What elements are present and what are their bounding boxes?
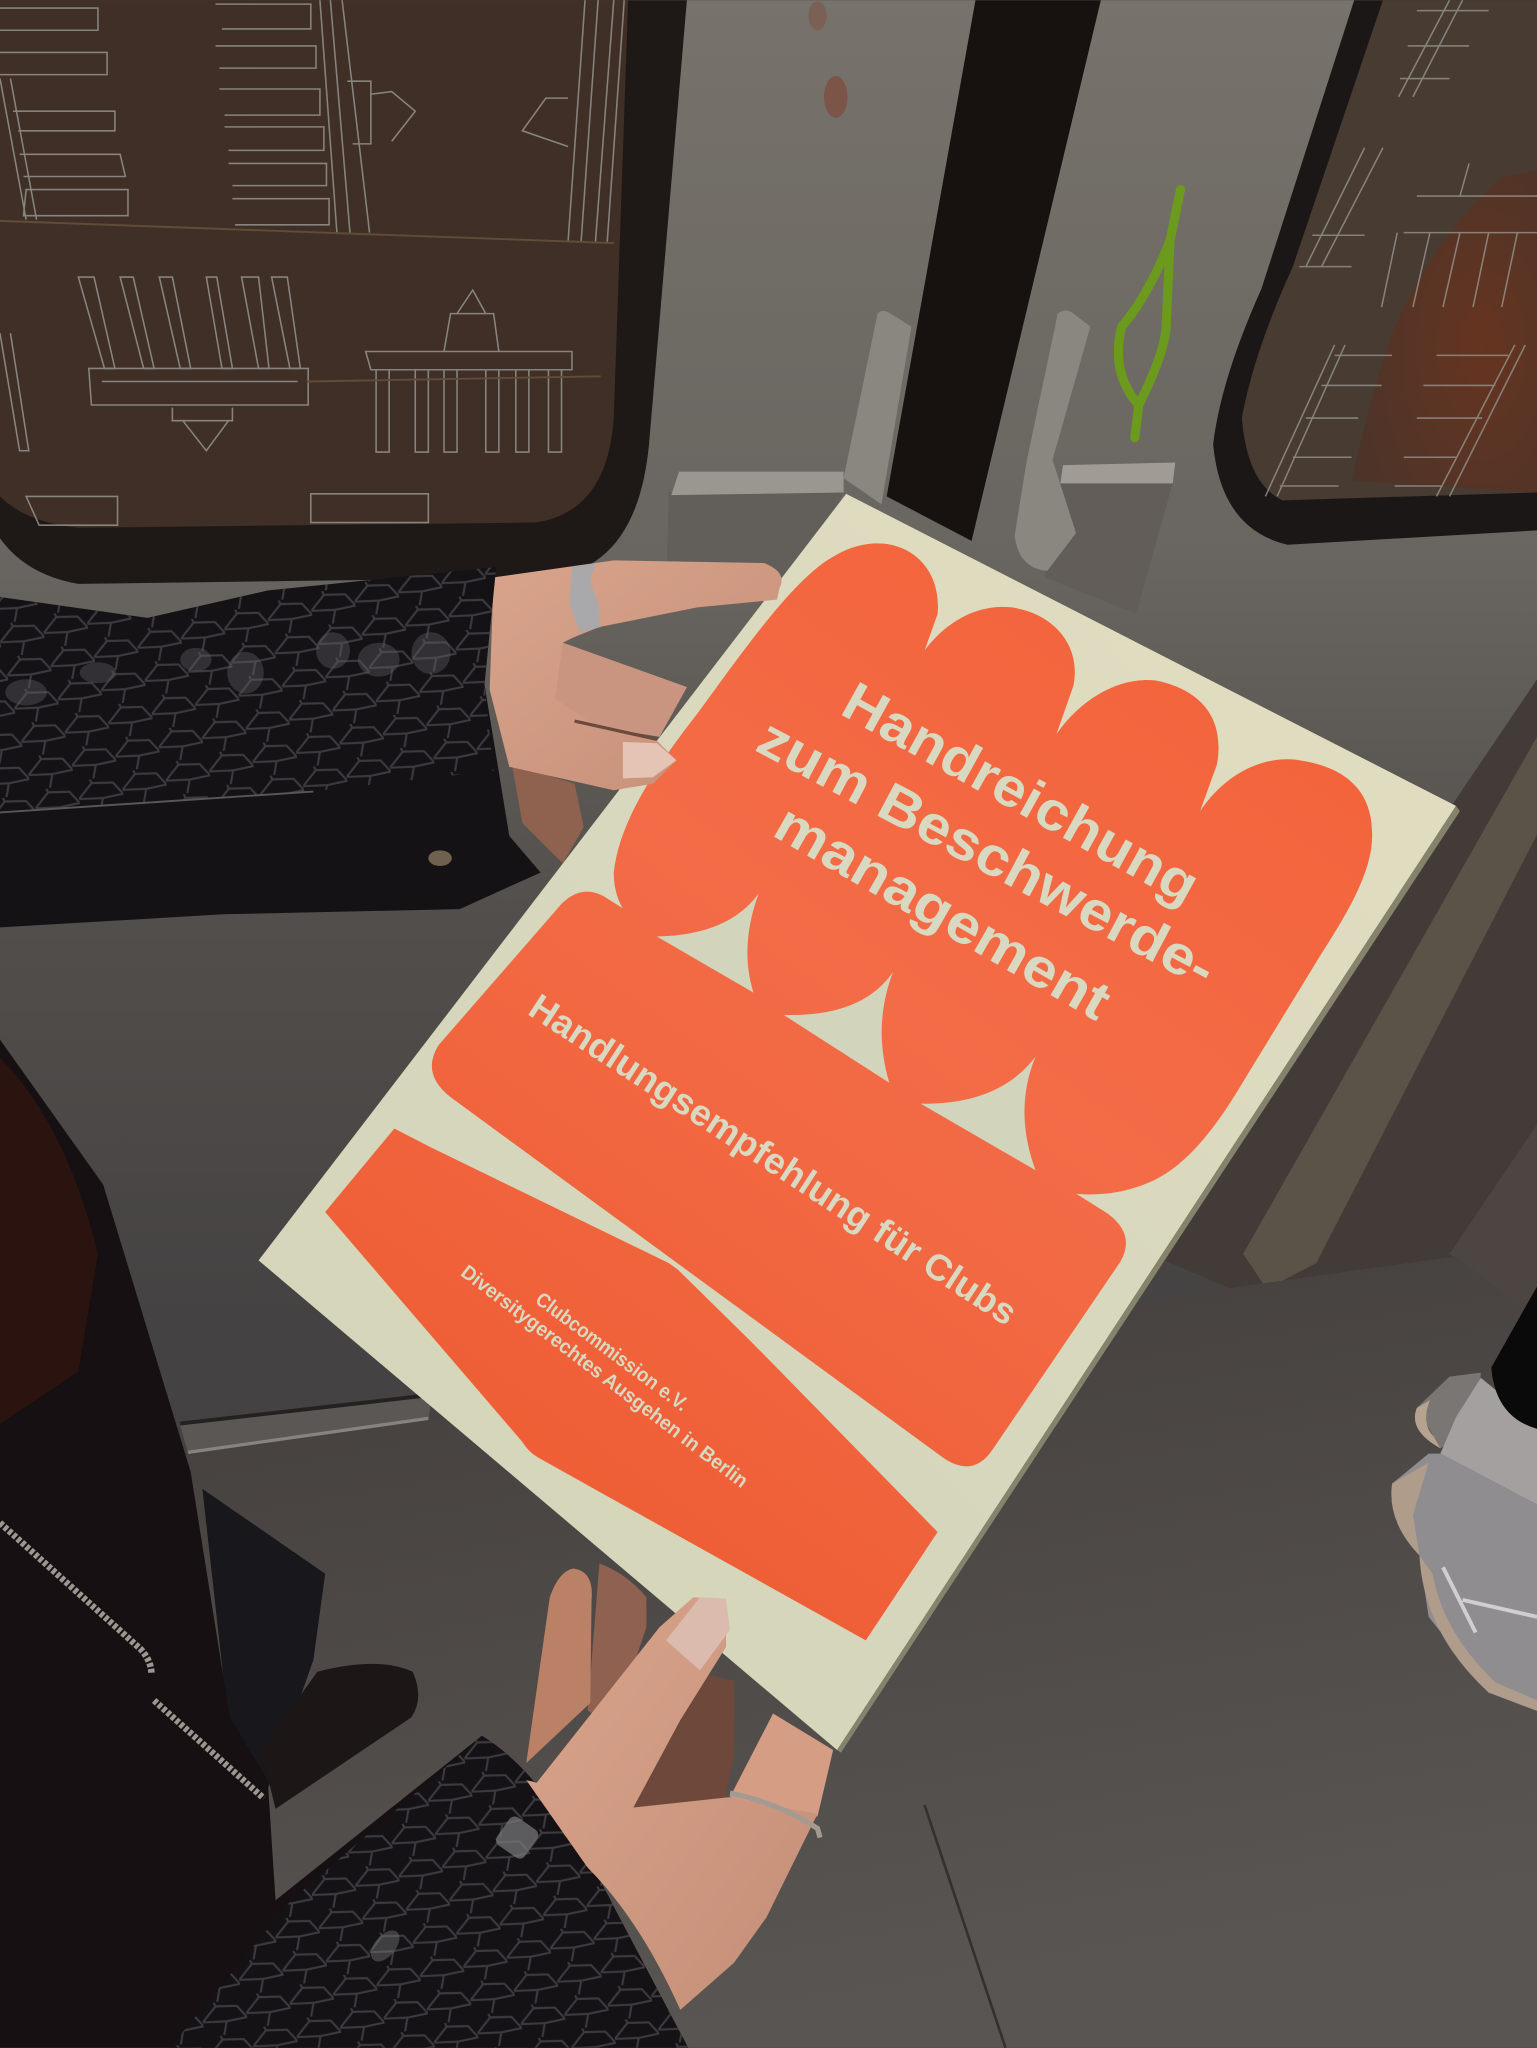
black shoe [261, 1664, 418, 1809]
lower jacket body [0, 1040, 688, 2048]
brochure sheet [259, 494, 1460, 1753]
lower sleeve [170, 1736, 688, 2048]
pale notch 1 [657, 893, 759, 993]
silver ring [730, 1793, 820, 1838]
upper jacket sleeve [0, 567, 541, 927]
sleeve button [428, 850, 452, 866]
title: Handreichung [833, 669, 1210, 916]
lower hand [526, 1597, 820, 2010]
door centre gap [887, 0, 1101, 541]
leather highlights [5, 632, 451, 705]
jacket zipper [0, 1523, 264, 1798]
pale notch 2 [784, 972, 893, 1083]
dark trouser leg [202, 1489, 325, 1789]
middle finger shading [555, 643, 687, 737]
door sill [180, 1395, 432, 1454]
title: zum Beschwerde- [748, 706, 1227, 999]
door handle plate left [666, 472, 844, 614]
lower right wall panel [1450, 1125, 1537, 1319]
publisher tagline: Diversitygerechtes Ausgehen in Berlin [457, 1261, 752, 1493]
upper hand [490, 560, 782, 863]
pale notch 3 [921, 1057, 1036, 1170]
palm and fingers [490, 560, 782, 790]
orange subtitle block [432, 892, 1126, 1466]
door handle plate right [1045, 462, 1175, 614]
right foot [1391, 1286, 1537, 1711]
orange scalloped title block [614, 543, 1372, 1194]
title: management [764, 791, 1122, 1032]
silver ring [569, 563, 601, 632]
door frame strip right [1243, 737, 1537, 1289]
thumb nail [666, 1597, 730, 1670]
rust stain [808, 2, 848, 118]
publisher line: Clubcommission e.V. [531, 1289, 692, 1416]
door handle left [844, 311, 911, 504]
gap line between fingers [575, 721, 657, 739]
orange footer block [325, 1128, 938, 1640]
subtitle: Handlungsempfehlung für Clubs [522, 986, 1025, 1333]
green graffiti [1118, 190, 1180, 438]
floor seam [925, 1805, 1006, 2048]
pinky finger [512, 764, 584, 863]
window line drawings of Brandenburg Gate [0, 0, 624, 525]
door handle right [1015, 310, 1090, 571]
finger nail [623, 742, 676, 778]
right window [1213, 0, 1537, 545]
title [748, 669, 1227, 1032]
lower fingers behind brochure [526, 1563, 833, 1817]
door shadow area beside brochure [1149, 679, 1537, 1319]
floor [170, 1256, 1537, 2048]
left window [0, 0, 687, 584]
